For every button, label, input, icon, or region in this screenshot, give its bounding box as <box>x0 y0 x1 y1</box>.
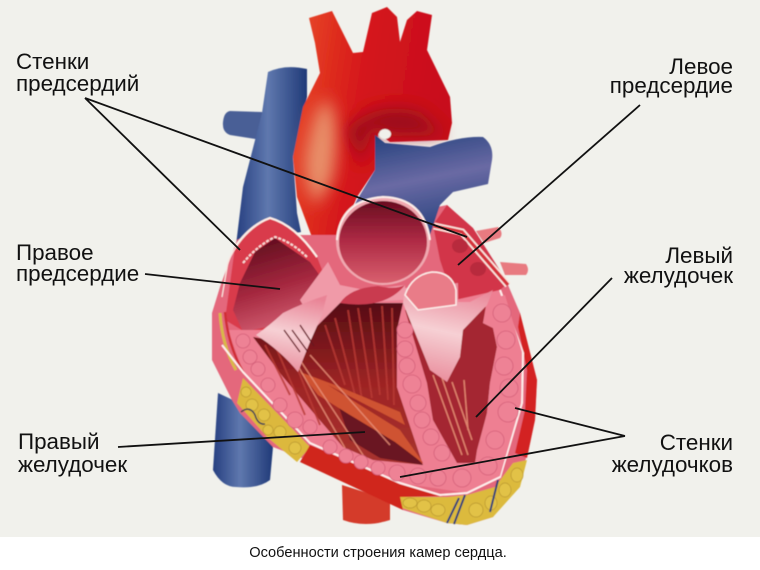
left atrium <box>433 205 508 305</box>
label: ventricle walls: желудочков <box>612 452 733 477</box>
dark mesh <box>335 395 423 465</box>
right ventricle cavity <box>253 303 423 465</box>
caption: Особенности строения камер сердца. <box>249 545 507 561</box>
right atrium wall <box>225 218 330 335</box>
aorta <box>293 7 452 266</box>
septal valve leaflet <box>340 285 405 305</box>
gap under arch <box>379 129 391 139</box>
outer wall lower <box>300 445 445 510</box>
line: right ventricle <box>118 432 365 447</box>
right atrium cavity <box>233 238 328 332</box>
pulmonary vein openings <box>452 239 486 276</box>
pulmonary trunk <box>340 135 492 235</box>
fat deposit right <box>400 460 527 525</box>
label: right atrium: предсердие <box>16 261 139 286</box>
coronary vessels <box>447 480 498 524</box>
label: left ventricle: желудочек <box>624 263 733 288</box>
aortic arch shadow <box>345 109 445 165</box>
right ventricle trabeculae <box>265 306 394 425</box>
superior vena cava branch <box>223 111 262 140</box>
line: left ventricle <box>476 278 612 417</box>
label: right atrium: Правое <box>16 240 94 265</box>
left outer wall detail <box>220 313 236 370</box>
septal junction <box>300 262 405 335</box>
label: left ventricle: Левый <box>665 243 733 268</box>
line: atria walls <box>85 98 467 250</box>
line: right atrium <box>145 274 280 289</box>
inferior vena cava <box>213 393 273 487</box>
descending aorta <box>342 485 390 524</box>
myocardium lobes <box>236 304 518 487</box>
outer wall right <box>515 313 537 458</box>
superior vena cava <box>236 67 307 245</box>
line: ventricle walls <box>400 408 625 477</box>
label: left atrium: предсердие <box>610 73 733 98</box>
aortic valve leaflets <box>405 272 456 310</box>
myocardium wall <box>228 290 523 493</box>
pulmonary veins <box>476 227 528 275</box>
heart body <box>212 205 537 525</box>
mitral valve <box>403 283 493 382</box>
aortic highlight <box>304 100 336 205</box>
line: left atrium <box>458 105 640 265</box>
heart illustration <box>212 7 537 525</box>
tricuspid valve <box>256 295 327 372</box>
left ventricle cavity <box>405 307 497 463</box>
label: atria walls: предсердий <box>16 71 139 96</box>
label: atria walls: Стенки <box>16 49 89 74</box>
septum <box>397 310 457 466</box>
fat deposit left <box>237 378 310 462</box>
left ventricle wall lobes <box>470 295 522 490</box>
atrium wall stripe <box>434 226 508 285</box>
endocardium line <box>222 290 523 495</box>
label: right ventricle: желудочек <box>18 452 127 477</box>
leader lines <box>85 98 640 477</box>
label: right ventricle: Правый <box>18 429 100 454</box>
right ventricle muscle <box>300 372 424 464</box>
valve opening <box>336 197 430 285</box>
label: left atrium: Левое <box>669 54 733 79</box>
label: ventricle walls: Стенки <box>660 430 733 455</box>
